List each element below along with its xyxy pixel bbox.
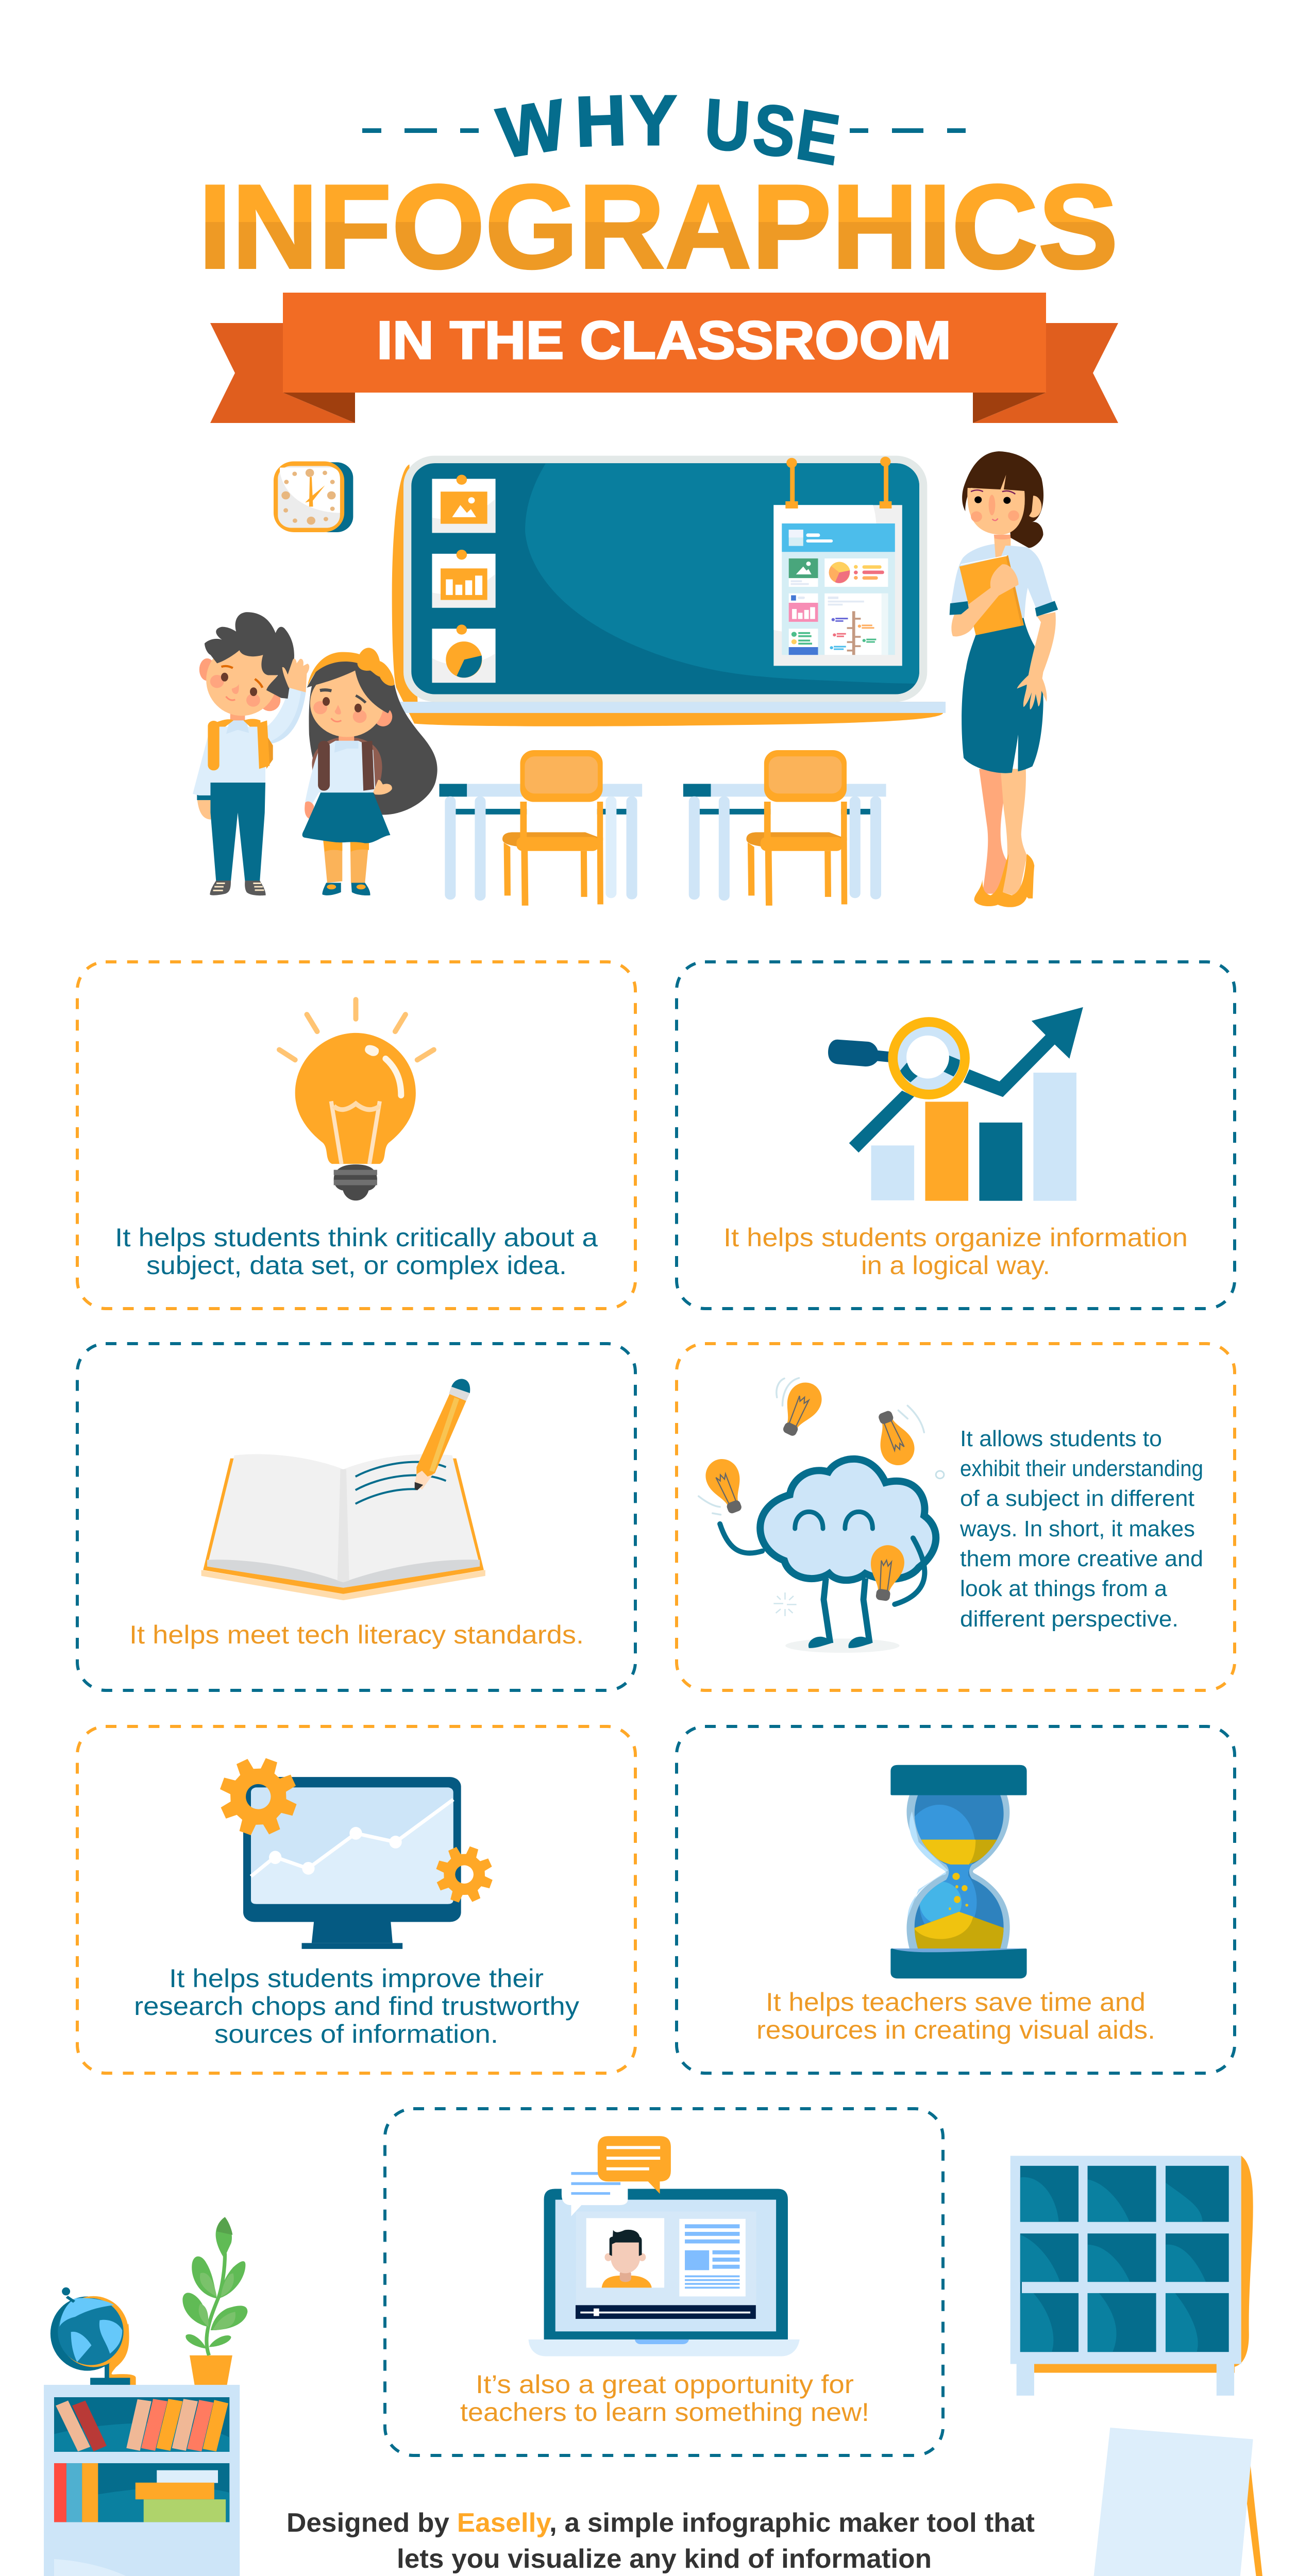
- panel: save time: [677, 1726, 1235, 2073]
- icon: bulb bottom: [866, 1543, 906, 1603]
- icon: bulb top: [773, 1377, 828, 1442]
- heading: infographics: INFOGRAPHICS: [198, 160, 1118, 294]
- pinned card: pie chart: [432, 624, 496, 683]
- boy: [193, 612, 309, 895]
- title: [198, 81, 1118, 423]
- books: [54, 2399, 228, 2522]
- text: exhibit understanding: them more creative and: [960, 1546, 1203, 1571]
- video progress bar: [576, 2305, 756, 2319]
- text: organize information: [723, 1223, 1188, 1280]
- text: teachers learn: [460, 2370, 869, 2427]
- heading: why use: [362, 81, 966, 180]
- text: tech literacy: It helps meet tech literacy standards.: [129, 1620, 584, 1649]
- panel: think critically: [77, 962, 635, 1309]
- article panel: [679, 2219, 746, 2296]
- hanging poster: [773, 456, 902, 666]
- heading: why use: USE: [702, 83, 844, 180]
- icon: bulb left: [701, 1454, 752, 1518]
- text: teachers learn: teachers to learn something new!: [460, 2398, 869, 2427]
- icon: potted plant: [182, 2217, 247, 2385]
- text: exhibit understanding: different perspective.: [960, 1606, 1178, 1632]
- text: research chops: [134, 1964, 579, 2048]
- icon: laptop with video lesson: [529, 2136, 800, 2356]
- text: organize information: It helps students organize information: [723, 1223, 1188, 1252]
- speech bubble white: [562, 2172, 628, 2216]
- bookcase with globe and plant: [44, 2217, 247, 2576]
- text: exhibit understanding: of a subject in different: [960, 1486, 1194, 1511]
- desk and chair 2: [683, 750, 886, 906]
- icon: globe: [50, 2287, 136, 2385]
- text: designed by: Designed by Easelly, a simple infographic maker tool that: [287, 2508, 1035, 2538]
- icon: magnified chart: [828, 1007, 1083, 1201]
- icon: light bulb: [279, 999, 434, 1200]
- text: exhibit understanding: It allows students to: [960, 1426, 1162, 1451]
- icon: juggling cloud character: [699, 1377, 944, 1653]
- icon: monitor with gears: [209, 1747, 461, 1949]
- text: save time: [756, 1988, 1155, 2044]
- text: save time: resources in creating visual aids.: [756, 2015, 1155, 2044]
- panel: organize information: [677, 962, 1235, 1309]
- text: teachers learn: It’s also a great opportunity for: [476, 2370, 854, 2399]
- text: research chops: research chops and find trustworthy: [134, 1992, 579, 2021]
- text: designed by: [287, 2508, 1035, 2574]
- wall clock: [274, 461, 353, 532]
- pinned card: image: [432, 475, 496, 533]
- teacher: [950, 451, 1058, 907]
- footer credit: [287, 2508, 1035, 2576]
- panel: teachers learn: [385, 2109, 943, 2455]
- text: think critically: [115, 1223, 598, 1280]
- panel: tech literacy: [77, 1344, 635, 1690]
- text: save time: It helps teachers save time and: [766, 1988, 1145, 2016]
- text: exhibit understanding: look at things from a: [960, 1576, 1168, 1601]
- speech bubble orange: [598, 2136, 671, 2194]
- blackboard: [392, 456, 946, 726]
- panel: research chops: [77, 1726, 635, 2073]
- text: designed by: lets you visualize any kind of information: [397, 2544, 932, 2574]
- icon: small gear: [428, 1838, 501, 1911]
- text: think critically: It helps students think critically about a: [115, 1223, 598, 1252]
- text: organize information: in a logical way.: [861, 1251, 1050, 1280]
- text: exhibit understanding: [959, 1426, 1203, 1632]
- icon: book and pencil: [201, 1379, 485, 1600]
- girl: [302, 648, 437, 895]
- easel: [1085, 2428, 1272, 2576]
- text: think critically: subject, data set, or complex idea.: [146, 1251, 567, 1280]
- panel: exhibit understanding: [677, 1344, 1235, 1690]
- icon: hourglass: [890, 1765, 1027, 1978]
- ribbon banner: IN THE CLASSROOM: [377, 311, 951, 370]
- text: exhibit understanding: exhibit their understanding: [960, 1456, 1203, 1481]
- bookcase: [44, 2385, 240, 2576]
- heading: why use: WHY: [493, 81, 677, 174]
- text: research chops: It helps students improve their: [169, 1964, 544, 1993]
- icon: large gear: [209, 1747, 308, 1846]
- video frame: [586, 2218, 664, 2287]
- ribbon banner: [210, 293, 1118, 423]
- desk and chair 1: [440, 750, 642, 906]
- cabinet and easel: [1010, 2156, 1272, 2576]
- text: research chops: sources of information.: [214, 2020, 498, 2048]
- text: exhibit understanding: ways. In short, it makes: [959, 1516, 1195, 1541]
- cabinet: [1010, 2156, 1253, 2396]
- pinned card: bar chart: [432, 550, 496, 608]
- classroom illustration: [193, 451, 1058, 907]
- icon: bulb right: [868, 1406, 919, 1470]
